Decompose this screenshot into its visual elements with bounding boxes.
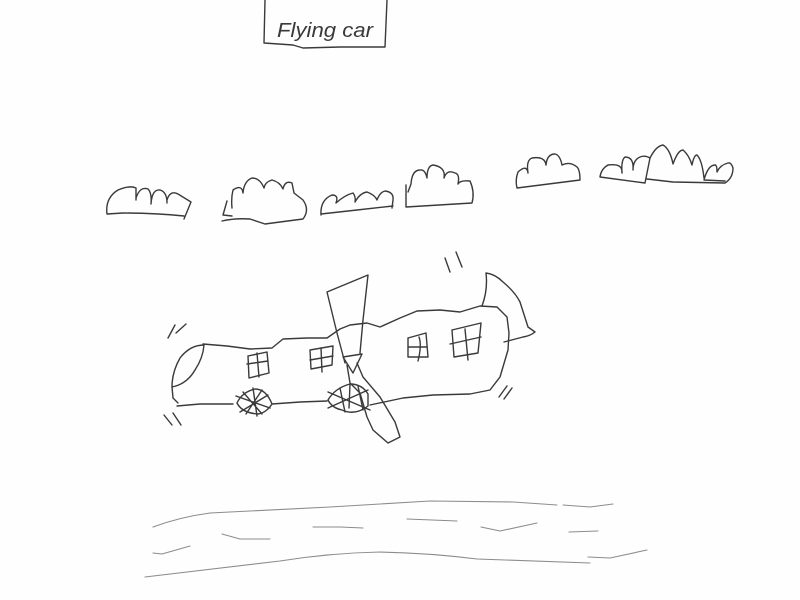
wheel 1 bbox=[236, 388, 272, 416]
cloud 4 bbox=[406, 165, 473, 207]
car underside bbox=[177, 404, 233, 406]
window 1 bbox=[247, 352, 269, 378]
flying car bbox=[172, 273, 535, 443]
window 2 bbox=[310, 346, 333, 372]
water lines bbox=[145, 501, 647, 577]
title box bbox=[264, 0, 387, 48]
propeller upper blade bbox=[327, 275, 368, 363]
wheel 2 bbox=[328, 384, 370, 412]
cloud 2 bbox=[222, 178, 306, 224]
cloud 5 bbox=[516, 154, 580, 188]
motion marks bbox=[164, 252, 512, 425]
nose lower edge bbox=[172, 387, 178, 403]
cloud group 6 bbox=[600, 145, 733, 183]
underside middle bbox=[272, 401, 327, 404]
cloud 3 bbox=[321, 191, 393, 215]
clouds row bbox=[107, 145, 733, 224]
car body bbox=[203, 306, 509, 405]
cloud 1 bbox=[107, 187, 191, 219]
propeller lower blade bbox=[347, 363, 400, 443]
title box: Flying car bbox=[277, 20, 374, 42]
window 3 bbox=[408, 333, 428, 361]
propeller hub bbox=[343, 354, 362, 373]
window 4 bbox=[450, 323, 481, 360]
nose bbox=[172, 345, 204, 387]
tail fin bbox=[482, 273, 535, 342]
